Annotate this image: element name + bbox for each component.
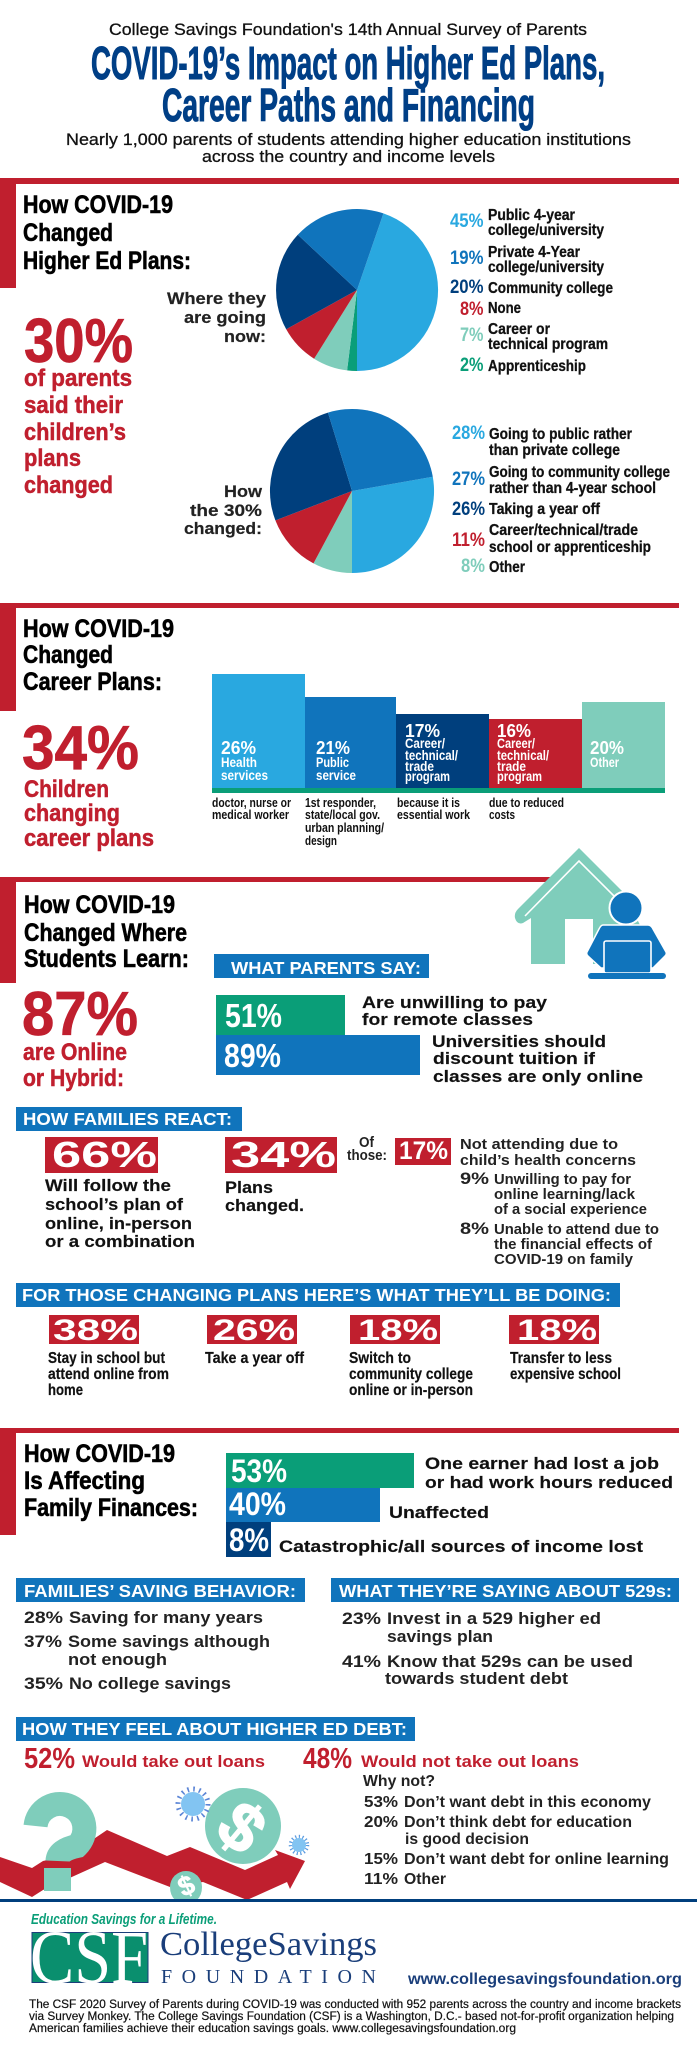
stat: 26 percent: 26% bbox=[213, 1314, 295, 1347]
stat: 17 percent and breakdown: 17% bbox=[399, 1137, 448, 1165]
stat: 17 percent and breakdown: child’s health concerns bbox=[460, 1153, 636, 1169]
stat: 18 percent community college: 18% bbox=[358, 1314, 438, 1347]
bar chart: income impact: 8% bbox=[229, 1522, 269, 1558]
legend: where they are going: Apprenticeship bbox=[488, 358, 586, 375]
stat: 48 percent would not take loans bbox=[303, 1743, 579, 1775]
stat: 52 percent would take loans bbox=[24, 1743, 265, 1775]
callout: 87 percent: 87% bbox=[22, 980, 138, 1049]
stat: 34 percent: 34% bbox=[231, 1134, 336, 1175]
bar chart: income impact bbox=[226, 1453, 673, 1558]
bar notes: medical worker bbox=[212, 808, 289, 822]
title bbox=[91, 37, 605, 131]
pie chart: how the 30 percent changed bbox=[270, 409, 434, 573]
panel: saving behavior: Some savings although bbox=[68, 1633, 270, 1651]
bar notes: 1st responder, bbox=[305, 796, 376, 810]
legend: how the 30 percent changed: 11% bbox=[452, 530, 485, 551]
panel: about 529s: Invest in a 529 higher ed bbox=[387, 1610, 601, 1628]
stat: 38 percent bbox=[48, 1314, 169, 1399]
heading: Changed bbox=[23, 219, 113, 247]
legend: where they are going: 20% bbox=[450, 277, 484, 298]
reasons list: Don’t think debt for education bbox=[404, 1814, 632, 1831]
bar chart: what parents say: for remote classes bbox=[362, 1010, 533, 1029]
stat: 18 percent transfer: expensive school bbox=[510, 1366, 621, 1383]
callout: 34 percent: 34% bbox=[22, 714, 139, 783]
legend: how the 30 percent changed: Taking a year off bbox=[489, 501, 601, 518]
heading bar: higher ed debt: HOW THEY FEEL ABOUT HIGHER ED DEBT: bbox=[22, 1719, 407, 1739]
callout: 30 percent: 30% bbox=[24, 307, 133, 376]
stat: 17 percent and breakdown: Not attending due to bbox=[460, 1137, 618, 1153]
panel: saving behavior: 28% bbox=[24, 1609, 63, 1627]
icon: house with student at laptop bbox=[515, 848, 666, 979]
bar chart: what parents say: Are unwilling to pay bbox=[362, 993, 548, 1012]
pie label: where they are going: now: bbox=[224, 328, 266, 346]
pie label: how the 30 percent changed: changed: bbox=[184, 520, 262, 538]
bar chart: career fields: Health bbox=[221, 755, 257, 770]
methodology note bbox=[29, 1999, 681, 2035]
bar notes: costs bbox=[489, 808, 515, 822]
pie label: how the 30 percent changed bbox=[184, 483, 262, 538]
bar chart: career fields: program bbox=[405, 769, 450, 784]
panel: about 529s: towards student debt bbox=[385, 1670, 569, 1688]
stat: 66 percent: Will follow the bbox=[45, 1176, 171, 1195]
logo bbox=[30, 1916, 377, 2000]
subtitle: Nearly 1,000 parents of students attending higher education institutions bbox=[66, 130, 631, 149]
stat: 18 percent community college bbox=[349, 1314, 473, 1399]
panel: where students learn bbox=[0, 848, 666, 1399]
legend: where they are going: 7% bbox=[460, 325, 484, 346]
heading: Changed Where bbox=[24, 919, 187, 947]
survey line: College Savings Foundation's 14th Annual Survey of Parents bbox=[109, 20, 587, 39]
bar notes: due to reduced bbox=[489, 796, 564, 810]
reasons list: Don’t want debt for online learning bbox=[404, 1851, 669, 1868]
callout: 34 percent: changing bbox=[24, 800, 120, 827]
stat: 38 percent: home bbox=[48, 1382, 83, 1399]
legend: where they are going: technical program bbox=[488, 336, 608, 353]
callout: 34 percent: career plans bbox=[24, 825, 154, 852]
reasons list: 15% bbox=[364, 1851, 398, 1868]
bar chart: career fields: service bbox=[316, 768, 356, 783]
panel: about 529s: 41% bbox=[342, 1653, 381, 1671]
illustration: debt arrow, question mark, coins and viruses: $ bbox=[203, 1786, 281, 1869]
panel: saving behavior: No college savings bbox=[69, 1675, 231, 1693]
callout: 87 percent: or Hybrid: bbox=[23, 1065, 124, 1092]
stat: 17 percent and breakdown: 8% bbox=[460, 1219, 489, 1238]
legend: where they are going: 19% bbox=[450, 248, 484, 269]
bar notes: design bbox=[305, 834, 337, 848]
subtitle bbox=[66, 130, 631, 166]
stat: 17 percent and breakdown: Unable to attend due to bbox=[494, 1222, 659, 1238]
bar chart: career fields: trade bbox=[497, 759, 526, 774]
legend: where they are going: Private 4-Year bbox=[488, 244, 580, 261]
stat: 18 percent community college: online or in-person bbox=[349, 1382, 473, 1399]
stat: 18 percent transfer: 18% bbox=[517, 1314, 597, 1347]
stat: 17 percent and breakdown: online learning/lack bbox=[494, 1187, 636, 1203]
panel: career plans bbox=[0, 603, 679, 852]
reasons list bbox=[363, 1773, 669, 1888]
pie label: where they are going bbox=[167, 290, 267, 346]
label: of those: Of bbox=[359, 1135, 374, 1151]
reasons list: Other bbox=[404, 1871, 446, 1888]
bar notes bbox=[212, 796, 564, 848]
reasons list: 20% bbox=[364, 1814, 398, 1831]
bar chart: career fields bbox=[212, 674, 665, 793]
legend: how the 30 percent changed: 8% bbox=[461, 556, 485, 577]
bar chart: income impact: or had work hours reduced bbox=[425, 1473, 673, 1492]
panel: family finances bbox=[0, 1428, 679, 1693]
logo: CSF bbox=[30, 1916, 148, 2000]
methodology note: American families achieve their education savings goals. www.collegesavingsfoundation.org bbox=[29, 2023, 516, 2035]
reasons list: Don’t want debt in this economy bbox=[404, 1794, 651, 1811]
legend: where they are going: 2% bbox=[460, 355, 484, 376]
heading bbox=[23, 191, 191, 275]
bar chart: what parents say: discount tuition if bbox=[433, 1049, 595, 1068]
bar chart: career fields: 16% bbox=[497, 721, 531, 741]
legend: how the 30 percent changed: 27% bbox=[452, 469, 485, 490]
legend: where they are going: Community college bbox=[488, 280, 613, 297]
panel: higher ed debt bbox=[0, 1717, 669, 1903]
footer bbox=[0, 1899, 697, 2035]
bar chart: career fields: program bbox=[497, 769, 542, 784]
bar chart: what parents say: 51% bbox=[225, 997, 282, 1034]
stat: 26 percent: Take a year off bbox=[205, 1350, 305, 1367]
panel: higher ed plans bbox=[0, 178, 679, 577]
pie label: where they are going: are going bbox=[184, 309, 266, 327]
illustration: debt arrow, question mark, coins and viruses: $ bbox=[173, 1869, 200, 1903]
stat: 34 percent: Plans bbox=[225, 1178, 273, 1197]
pie chart: where they are going bbox=[276, 209, 438, 371]
stat: 17 percent and breakdown: the financial effects of bbox=[494, 1237, 652, 1253]
methodology note: The CSF 2020 Survey of Parents during COVID-19 was conducted with 952 parents across the country and income brackets bbox=[29, 1999, 681, 2011]
stat: 34 percent bbox=[225, 1134, 337, 1215]
header bbox=[66, 20, 631, 166]
label: of those: those: bbox=[347, 1148, 387, 1164]
heading: Changed bbox=[23, 641, 113, 669]
bar chart: career fields: 17% bbox=[405, 721, 440, 741]
stat: 52 percent would take loans: Would take out loans bbox=[82, 1752, 265, 1771]
panel: saving behavior bbox=[16, 1578, 305, 1693]
stat: 18 percent community college: Switch to bbox=[349, 1350, 411, 1367]
stat: 18 percent transfer bbox=[509, 1314, 621, 1383]
panel: about 529s bbox=[331, 1578, 679, 1688]
legend: how the 30 percent changed: 28% bbox=[452, 423, 485, 444]
bar chart: what parents say: 89% bbox=[224, 1037, 281, 1074]
bar chart: career fields: technical/ bbox=[405, 748, 458, 763]
subtitle: across the country and income levels bbox=[202, 147, 495, 166]
callout: 87 percent bbox=[22, 980, 138, 1092]
stat: 17 percent and breakdown: of a social experience bbox=[494, 1202, 647, 1218]
stat: 18 percent community college: community college bbox=[349, 1366, 473, 1383]
panel: about 529s: 23% bbox=[342, 1610, 381, 1628]
stat: 38 percent: 38% bbox=[53, 1314, 138, 1347]
heading: Students Learn: bbox=[24, 945, 189, 973]
legend: how the 30 percent changed: 26% bbox=[452, 499, 485, 520]
legend: how the 30 percent changed bbox=[452, 423, 670, 577]
tagline: Education Savings for a Lifetime. bbox=[31, 1911, 217, 1928]
stat: 48 percent would not take loans: Would not take out loans bbox=[361, 1752, 579, 1771]
pie label: how the 30 percent changed: the 30% bbox=[190, 502, 262, 520]
legend: how the 30 percent changed: Going to public rather bbox=[489, 426, 632, 443]
panel: saving behavior: not enough bbox=[68, 1651, 167, 1669]
pie label: where they are going: Where they bbox=[167, 290, 267, 308]
stat: 17 percent and breakdown bbox=[395, 1137, 659, 1268]
logo: FOUNDATION bbox=[161, 1966, 376, 1988]
callout: 30 percent: changed bbox=[24, 472, 113, 499]
legend: how the 30 percent changed: rather than 4-year school bbox=[489, 480, 656, 497]
bar chart: career fields: trade bbox=[405, 759, 434, 774]
callout: 34 percent: Children bbox=[24, 776, 109, 803]
heading: How COVID-19 bbox=[23, 191, 173, 219]
stat: 48 percent would not take loans: 48% bbox=[303, 1743, 352, 1775]
legend: where they are going: college/university bbox=[488, 259, 604, 276]
callout: 30 percent: of parents bbox=[24, 365, 132, 392]
callout: 34 percent bbox=[22, 714, 154, 852]
callout: 30 percent: said their bbox=[24, 392, 123, 419]
legend: how the 30 percent changed: Other bbox=[489, 559, 525, 576]
bar chart: career fields: Career/ bbox=[497, 736, 535, 751]
heading: How COVID-19 bbox=[23, 615, 174, 643]
stat: 18 percent transfer: Transfer to less bbox=[510, 1350, 612, 1367]
bar chart: what parents say bbox=[216, 993, 643, 1086]
stat: 17 percent and breakdown: COVID-19 on family bbox=[494, 1252, 633, 1268]
bar chart: career fields: 21% bbox=[316, 738, 350, 758]
stat: 17 percent and breakdown: 9% bbox=[460, 1169, 489, 1188]
legend: where they are going: None bbox=[488, 300, 521, 317]
legend: where they are going: Career or bbox=[488, 321, 550, 338]
bar chart: what parents say: Universities should bbox=[432, 1032, 606, 1051]
heading: How COVID-19 bbox=[24, 1440, 175, 1468]
stat: 26 percent bbox=[205, 1314, 305, 1367]
reasons list: 53% bbox=[364, 1794, 398, 1811]
heading: Career Plans: bbox=[23, 668, 162, 696]
bar chart: career fields: Career/ bbox=[405, 736, 445, 751]
stat: 66 percent: 66% bbox=[52, 1134, 157, 1175]
heading bar: those changing plans: FOR THOSE CHANGING PLANS HERE’S WHAT THEY’LL BE DOING: bbox=[22, 1285, 611, 1305]
reasons list: is good decision bbox=[405, 1831, 529, 1848]
heading bar: how families react: HOW FAMILIES REACT: bbox=[23, 1109, 232, 1129]
callout: 30 percent: plans bbox=[24, 445, 81, 472]
bar chart: income impact: 40% bbox=[229, 1486, 286, 1522]
legend: where they are going: college/university bbox=[488, 222, 604, 239]
illustration: debt arrow, question mark, coins and viruses bbox=[0, 1786, 308, 1903]
heading: Family Finances: bbox=[24, 1494, 198, 1522]
logo: CollegeSavings bbox=[160, 1926, 377, 1963]
stat: 66 percent: or a combination bbox=[45, 1232, 195, 1251]
heading bbox=[24, 1440, 198, 1522]
bar chart: income impact: One earner had lost a job bbox=[425, 1454, 659, 1473]
stat: 66 percent: online, in-person bbox=[45, 1214, 192, 1233]
panel: about 529s: WHAT THEY’RE SAYING ABOUT 529s: bbox=[339, 1581, 672, 1601]
callout: 30 percent bbox=[24, 307, 133, 499]
panel: about 529s: savings plan bbox=[387, 1628, 493, 1646]
bar notes: essential work bbox=[397, 808, 470, 822]
bar notes: state/local gov. bbox=[305, 808, 380, 822]
legend: where they are going: Public 4-year bbox=[488, 207, 575, 224]
bar chart: income impact: Unaffected bbox=[389, 1503, 489, 1522]
stat: 66 percent bbox=[45, 1134, 195, 1251]
bar chart: income impact: 53% bbox=[231, 1453, 287, 1489]
heading: Is Affecting bbox=[24, 1467, 145, 1495]
panel: about 529s: Know that 529s can be used bbox=[387, 1653, 633, 1671]
callout: 87 percent: are Online bbox=[23, 1039, 127, 1066]
heading bbox=[24, 891, 189, 973]
bar chart: career fields: 20% bbox=[590, 738, 624, 758]
pie label: how the 30 percent changed: How bbox=[224, 483, 262, 501]
stat: 52 percent would take loans: 52% bbox=[24, 1743, 75, 1775]
legend: how the 30 percent changed: than private college bbox=[489, 442, 620, 459]
legend: where they are going bbox=[450, 207, 613, 376]
legend: how the 30 percent changed: school or apprenticeship bbox=[489, 539, 651, 556]
heading bbox=[23, 615, 174, 696]
heading: How COVID-19 bbox=[24, 891, 175, 919]
bar chart: career fields: technical/ bbox=[497, 748, 549, 763]
website: www.collegesavingsfoundation.org bbox=[407, 1971, 682, 1988]
bar notes: urban planning/ bbox=[305, 821, 384, 835]
panel: saving behavior: Saving for many years bbox=[69, 1609, 263, 1627]
bar chart: career fields: services bbox=[221, 768, 268, 783]
legend: how the 30 percent changed: Career/technical/trade bbox=[489, 522, 638, 539]
label: of those bbox=[347, 1135, 387, 1164]
bar notes: doctor, nurse or bbox=[212, 796, 291, 810]
stat: 17 percent and breakdown: Unwilling to pay for bbox=[494, 1172, 631, 1188]
bar chart: career fields: Public bbox=[316, 755, 349, 770]
methodology note: via Survey Monkey. The College Savings Foundation (CSF) is a Washington, D.C.- based not-for-profit organization helping bbox=[29, 2011, 674, 2023]
callout: 30 percent: children’s bbox=[24, 419, 126, 446]
panel: saving behavior: FAMILIES’ SAVING BEHAVIOR: bbox=[24, 1581, 296, 1601]
legend: where they are going: 45% bbox=[450, 211, 484, 232]
heading: Higher Ed Plans: bbox=[23, 247, 191, 275]
bar chart: career fields: 26% bbox=[221, 738, 256, 758]
stat: 34 percent: changed. bbox=[225, 1196, 304, 1215]
stat: 38 percent: attend online from bbox=[48, 1366, 169, 1383]
heading bar: what parents say: WHAT PARENTS SAY: bbox=[231, 958, 421, 978]
reasons list: Why not? bbox=[363, 1773, 435, 1790]
panel: saving behavior: 37% bbox=[24, 1633, 62, 1651]
bar chart: career fields: Other bbox=[590, 755, 620, 770]
legend: where they are going: 8% bbox=[460, 299, 484, 320]
panel: saving behavior: 35% bbox=[24, 1675, 63, 1693]
bar chart: income impact: Catastrophic/all sources of income lost bbox=[279, 1537, 643, 1556]
stat: 66 percent: school’s plan of bbox=[45, 1195, 183, 1214]
reasons list: 11% bbox=[364, 1871, 398, 1888]
stat: 38 percent: Stay in school but bbox=[48, 1350, 166, 1367]
bar notes: because it is bbox=[397, 796, 460, 810]
bar chart: what parents say: classes are only online bbox=[433, 1067, 643, 1086]
